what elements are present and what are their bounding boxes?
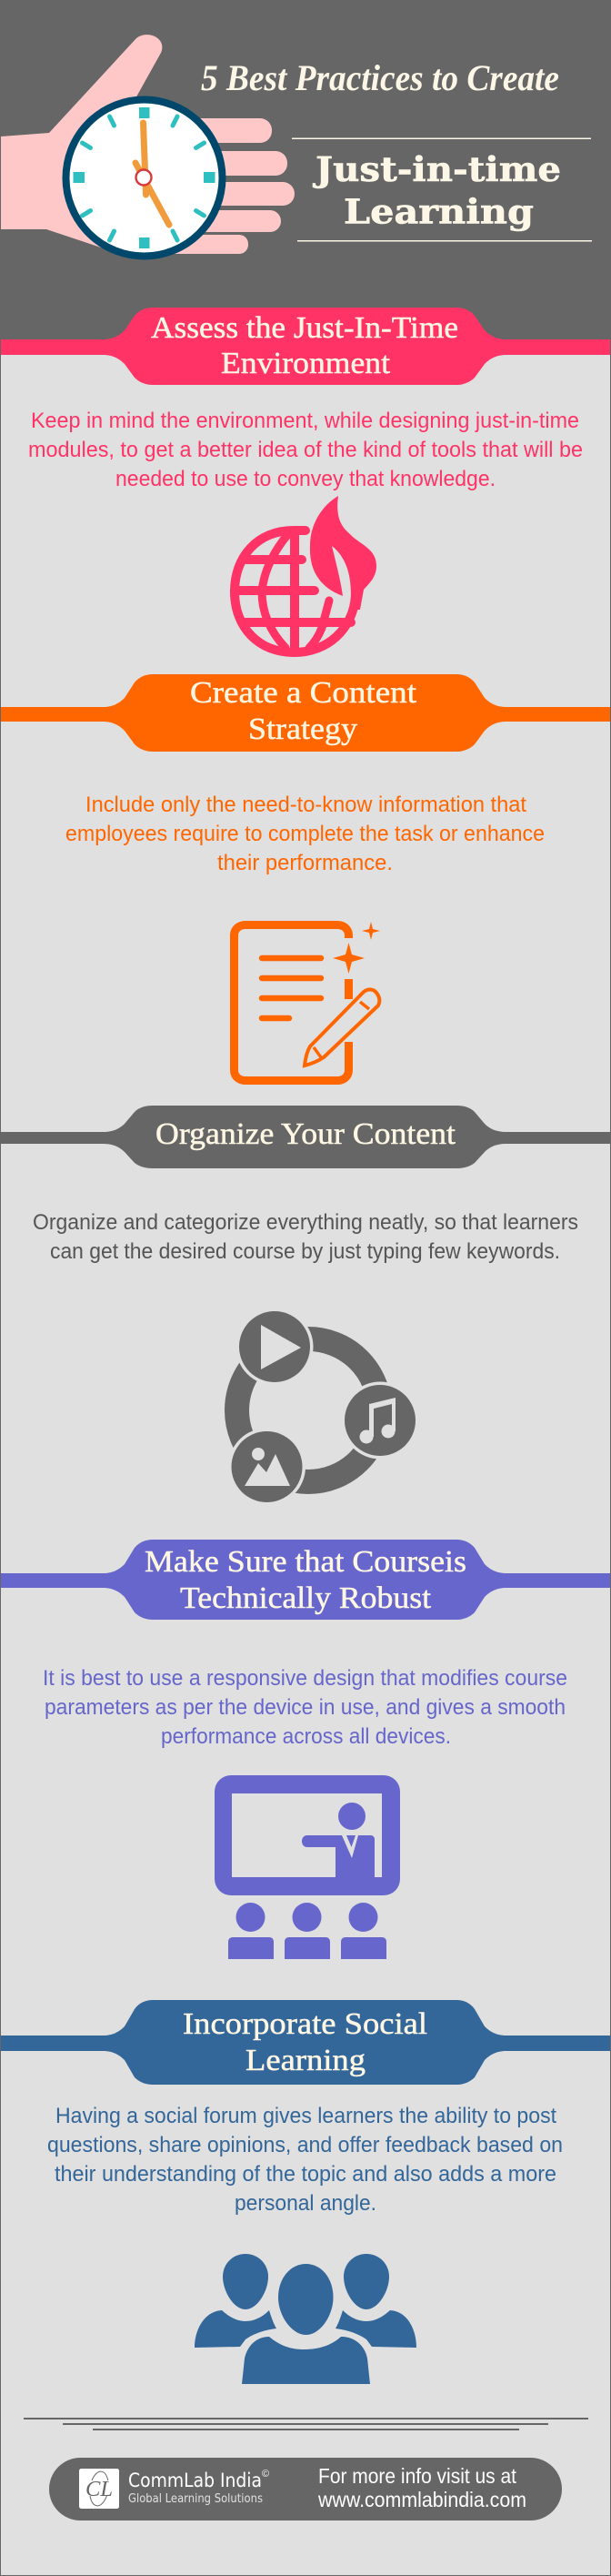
heading: Organize Your Content [155,1117,456,1151]
logo: CommLab India: © [262,2469,269,2480]
heading: Assess the Just-In-Time [151,311,458,345]
heading: Create a Content [190,676,417,710]
body text: parameters as per the device in use, and gives a smooth [45,1695,566,1720]
heading [190,676,417,746]
icon: notepad and pencil [235,922,380,1081]
heading: Learning [245,2044,366,2077]
banner: purple [1,1540,611,1620]
body text: can get the desired course by just typing few keywords. [50,1239,560,1264]
clock face [65,100,222,257]
body text: questions, share opinions, and offer feedback based on [47,2133,563,2157]
header panel [0,0,611,340]
footer pill [49,2458,562,2520]
icon: media cycle [231,1311,416,1502]
body text: personal angle. [235,2191,376,2216]
heading [145,1545,466,1615]
heading: Incorporate Social [183,2007,427,2041]
body text: their understanding of the topic and also adds a more [55,2162,556,2187]
body text: performance across all devices. [161,1724,451,1749]
clock centre [136,169,151,186]
heading: Strategy [248,712,357,746]
banner: orange [1,674,611,752]
logo: CommLab India: Global Learning Solutions [128,2492,263,2506]
logo: CommLab India [79,2469,269,2509]
icon: classroom presentation [215,1775,400,1959]
body text: modules, to get a better idea of the kind of tools that will be [28,438,583,462]
body text: Keep in mind the environment, while designing just-in-time [31,409,579,433]
title rule bottom [297,240,592,242]
body text: Include only the need-to-know information that [85,793,526,817]
body text [65,793,545,875]
section 4: technically robust [1,1540,611,1959]
body text: It is best to use a responsive design that modifies course [43,1666,567,1691]
title line 3: Learning [344,191,534,231]
title rule top [292,138,591,139]
banner: gray [1,1106,611,1168]
body text [43,1666,567,1749]
footer contact text [317,2464,526,2511]
footer contact text: www.commlabindia.com [317,2488,526,2511]
title line 1: 5 Best Practices to Create [201,57,559,98]
body text: their performance. [217,851,393,875]
logo: CommLab India: CommLab India [128,2470,262,2491]
body text: Organize and categorize everything neatly, so that learners [33,1210,578,1235]
heading: Make Sure that Courseis [145,1545,466,1579]
logo: CommLab India: CL [85,2478,113,2501]
hand [1,35,162,255]
icon: globe with leaf [235,496,376,652]
section 5: social learning [1,2000,611,2384]
footer divider lines [24,2418,588,2430]
heading [183,2007,427,2077]
section 1: assess the environment [1,308,611,652]
section 3: organize content [1,1106,611,1502]
icon: hand holding clock [1,35,295,257]
section 2: content strategy [1,674,611,1081]
body text [33,1210,578,1264]
body text: employees require to complete the task or enhance [65,822,545,846]
clock ticks [73,107,215,248]
body text [28,409,583,491]
body text: Having a social forum gives learners the ability to post [55,2104,556,2128]
banner: blue [1,2000,611,2085]
heading: Environment [221,347,391,380]
body text: needed to use to convey that knowledge. [115,467,496,491]
banner: pink [1,308,611,385]
icon: group of people [195,2254,416,2384]
footer contact text: For more info visit us at [318,2464,517,2488]
heading: Technically Robust [180,1581,432,1615]
title line 2: Just-in-time [313,149,561,189]
body text [47,2104,563,2216]
heading [151,311,458,380]
clock hands [135,123,169,225]
